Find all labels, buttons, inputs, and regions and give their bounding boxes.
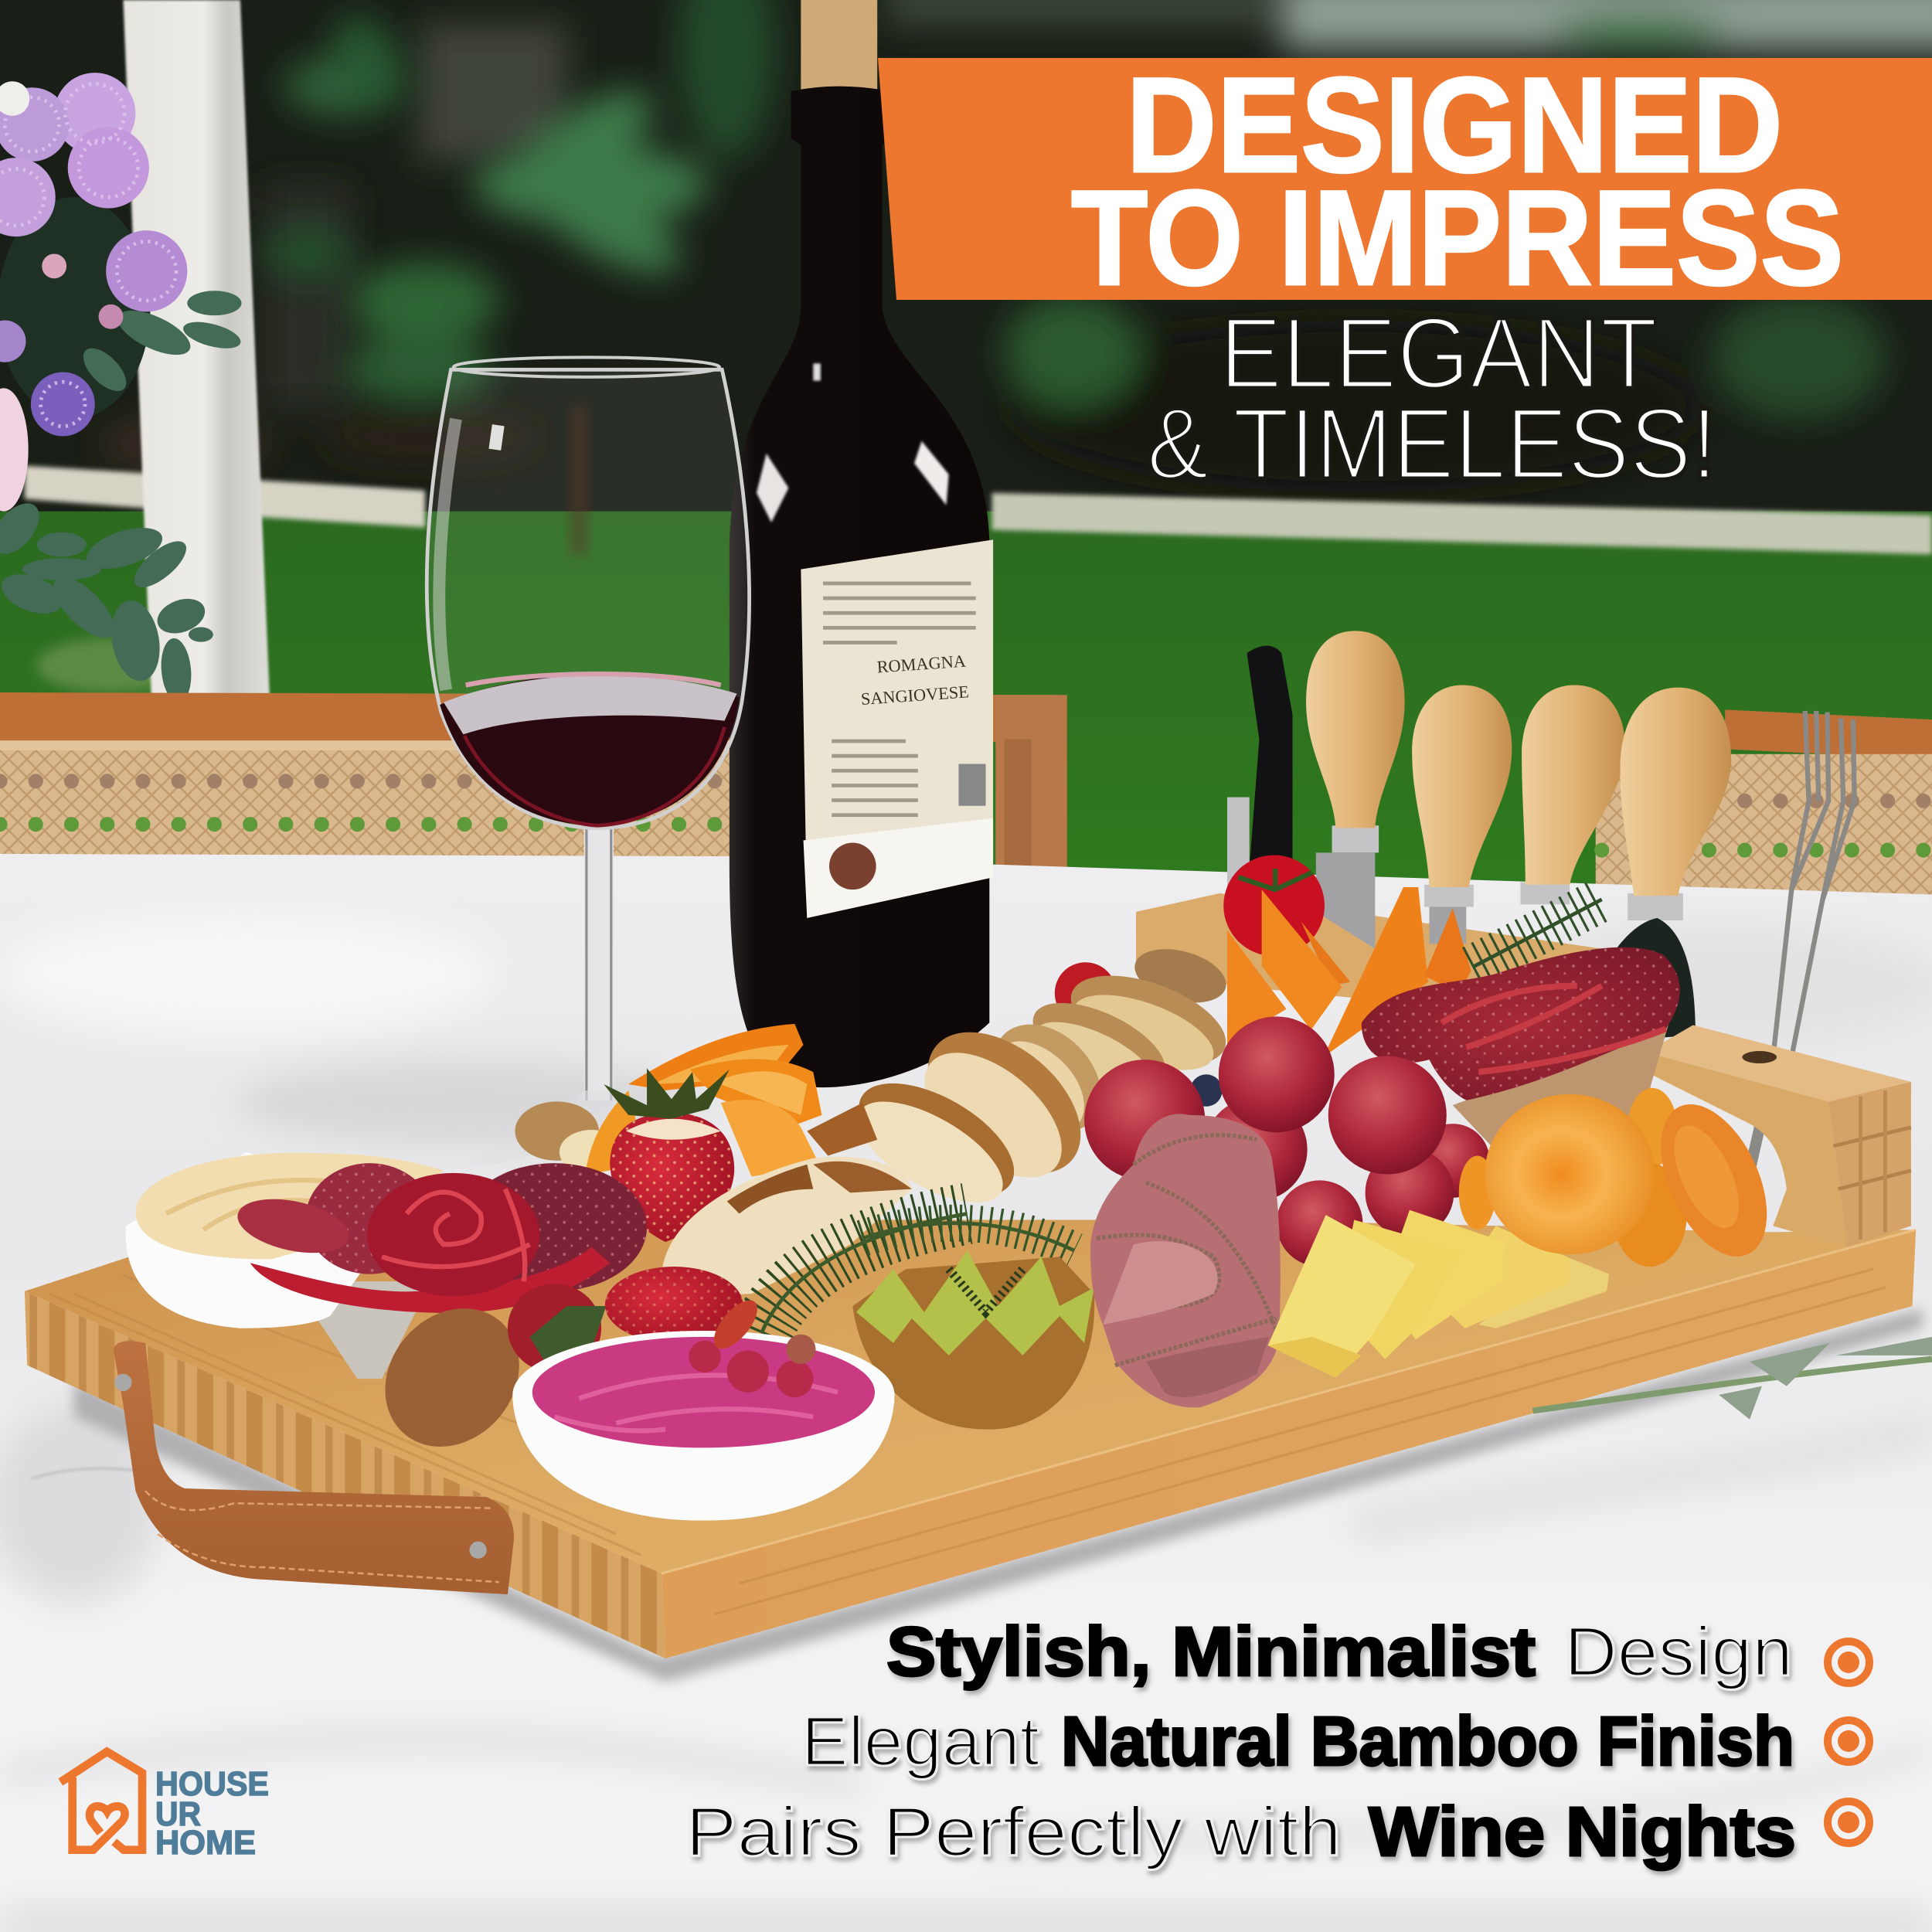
garden background xyxy=(0,0,1932,887)
feature list xyxy=(685,1614,1796,1871)
subheading: ELEGANT xyxy=(1219,296,1658,410)
wine glass xyxy=(427,357,750,1165)
ham folds xyxy=(1090,1114,1281,1407)
pink hummus bowl xyxy=(512,1293,895,1521)
feature line 3 xyxy=(685,1794,1796,1871)
bullet 3 xyxy=(1828,1801,1869,1843)
kiwi cup xyxy=(852,1250,1094,1430)
icon: house with heart xyxy=(60,1752,142,1850)
bottle label: ROMAGNA xyxy=(876,651,967,677)
headline: TO IMPRESS xyxy=(1071,163,1844,314)
dried apricots xyxy=(1459,1088,1788,1273)
bullet icons xyxy=(1828,1641,1869,1843)
flowers and foliage xyxy=(0,73,243,703)
bullet 2 xyxy=(1828,1720,1869,1762)
forks xyxy=(1748,711,1855,1177)
green twig xyxy=(1532,1337,1932,1420)
walnuts xyxy=(515,1101,624,1174)
bottle label: SANGIOVESE xyxy=(860,682,970,709)
salami rose left xyxy=(233,1163,647,1313)
bread slices xyxy=(807,940,1237,1223)
logo wordmark: UR xyxy=(155,1795,201,1833)
rosemary top xyxy=(1472,900,1602,968)
green lawn xyxy=(0,466,1932,893)
cream dip bowl xyxy=(125,1152,444,1328)
bamboo board xyxy=(25,1219,1916,1658)
cheese knives xyxy=(1306,631,1731,1037)
bullet 1 xyxy=(1828,1641,1869,1683)
feature line 1: Design xyxy=(1564,1614,1793,1691)
logo wordmark: HOME xyxy=(155,1824,256,1862)
orange slices xyxy=(585,1024,821,1177)
feature line 1 xyxy=(886,1614,1793,1691)
small strawberries xyxy=(508,1267,743,1372)
white pillar xyxy=(123,0,270,702)
tomato and cheddar wedges xyxy=(1055,855,1471,1057)
rosemary sprig xyxy=(761,1213,1074,1333)
marble table top xyxy=(0,854,1932,1932)
logo wordmark xyxy=(155,1765,269,1862)
wooden chair right xyxy=(1596,709,1932,900)
subheading: & TIMELESS! xyxy=(1147,386,1717,500)
logo wordmark: HOUSE xyxy=(155,1765,269,1803)
salami right xyxy=(1362,947,1680,1100)
bottle label xyxy=(801,539,993,918)
orange headline banner xyxy=(878,58,1932,300)
headline: DESIGNED xyxy=(1126,50,1783,201)
feature line 2: Natural Bamboo Finish xyxy=(1061,1703,1794,1781)
wine bottle xyxy=(730,0,993,1087)
wooden chair left xyxy=(0,692,1067,872)
large bread xyxy=(662,1157,912,1296)
feature line 2: Elegant xyxy=(801,1703,1039,1781)
subheading xyxy=(1147,296,1717,500)
headline xyxy=(1071,50,1844,314)
feature line 1: Stylish, Minimalist xyxy=(886,1614,1536,1691)
grapes xyxy=(1084,1016,1490,1267)
leather handle xyxy=(114,1341,514,1594)
feature line 3: Pairs Perfectly with xyxy=(685,1794,1342,1871)
blurred garden plants xyxy=(265,0,776,404)
cookie xyxy=(358,1281,547,1474)
cheese slices xyxy=(1268,1210,1609,1378)
logo: House Ur Home xyxy=(60,1752,269,1862)
bamboo fork block xyxy=(1646,1026,1911,1247)
strawberry top xyxy=(604,1068,734,1242)
board shadow xyxy=(74,1308,1922,1682)
foil cup right xyxy=(1453,1026,1668,1152)
back bamboo block xyxy=(1136,893,1602,1022)
feature line 3: Wine Nights xyxy=(1369,1794,1796,1871)
corkscrew xyxy=(1227,645,1293,889)
foil cup left xyxy=(292,1281,431,1379)
